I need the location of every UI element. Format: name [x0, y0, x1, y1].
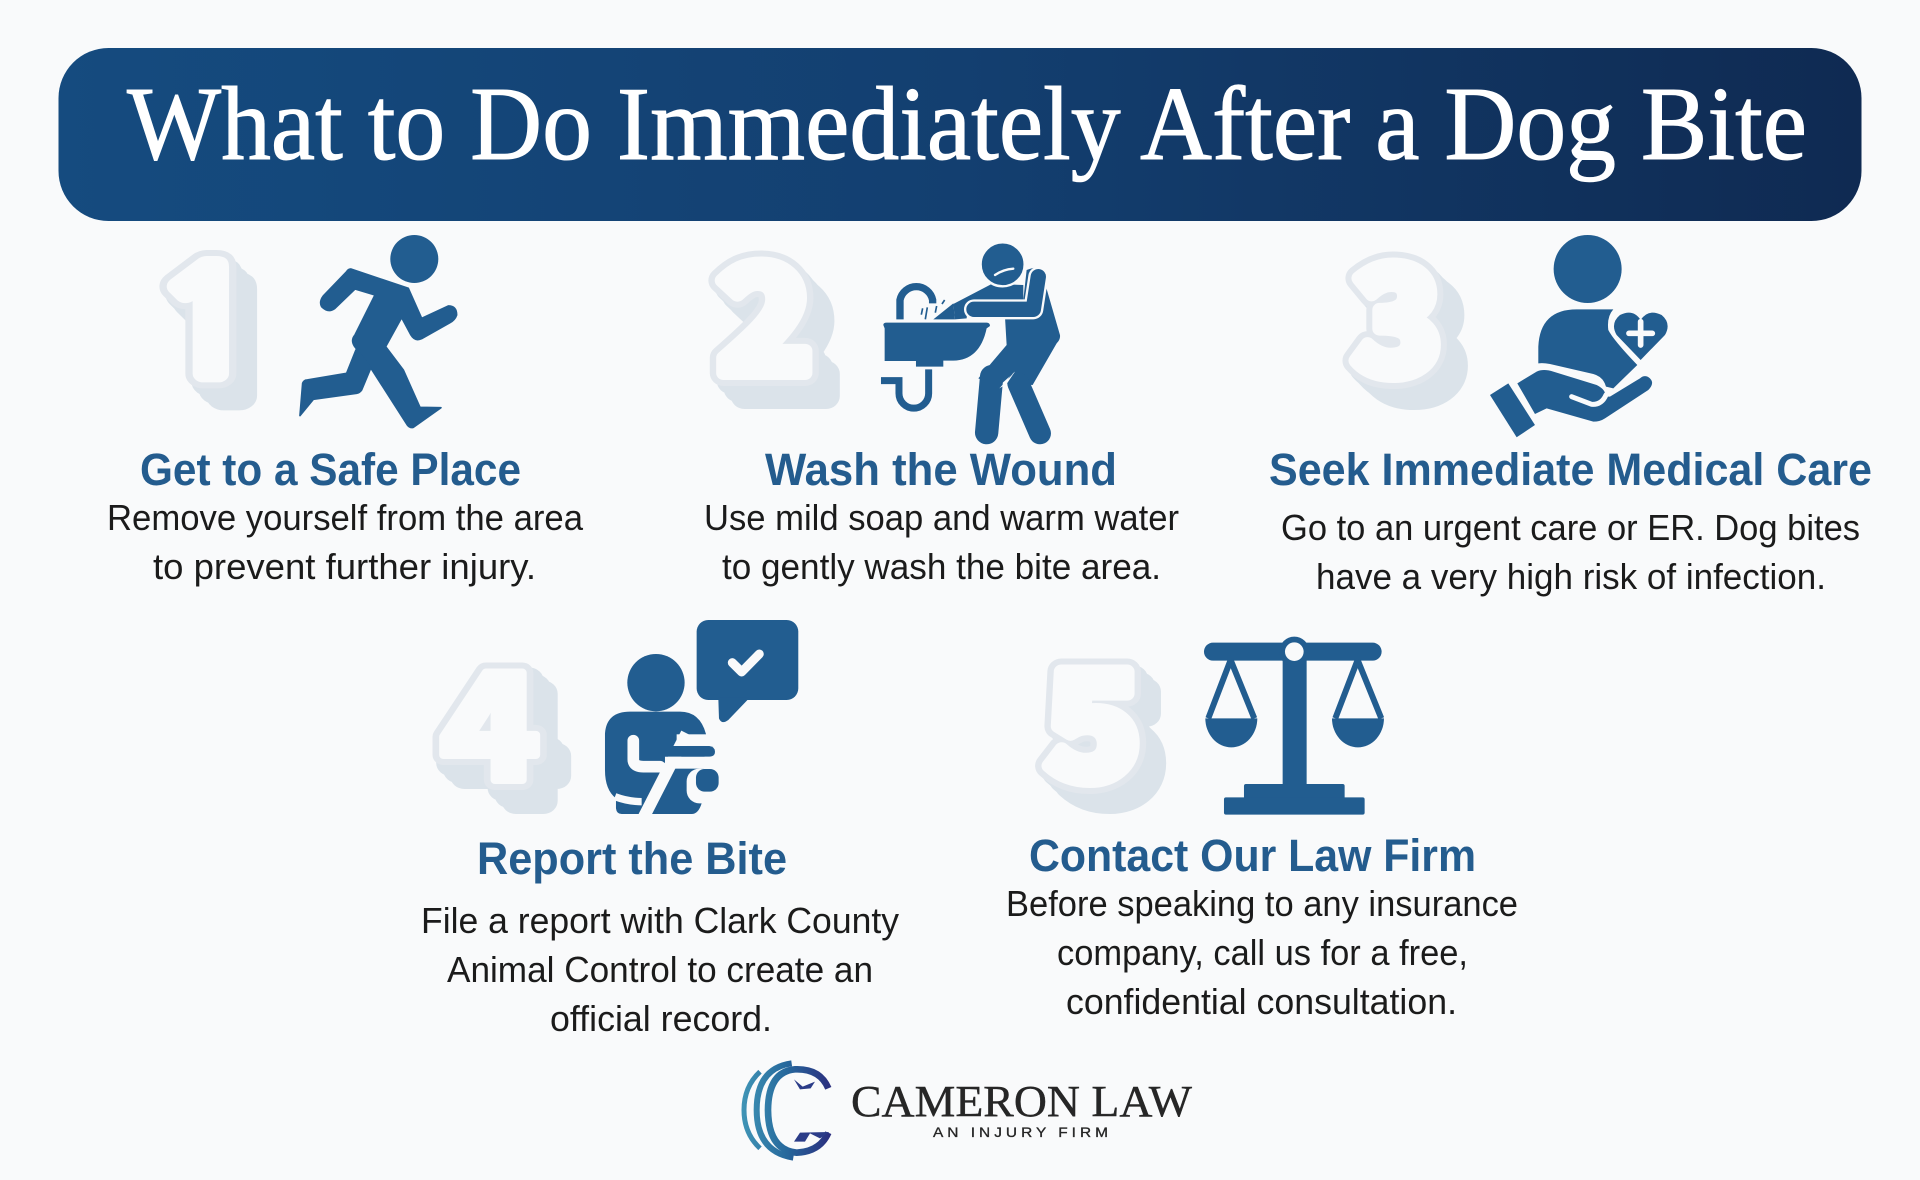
numeral 4: 4 — [440, 608, 540, 823]
numeral 5: 5 — [1065, 627, 1161, 842]
description: to prevent further injury. — [153, 546, 536, 587]
panel: step 5 — [1006, 607, 1518, 1022]
numeral 2: 2 — [738, 224, 834, 439]
logo tagline: AN INJURY FIRM — [933, 1125, 1112, 1140]
description: File a report with Clark County — [421, 900, 899, 941]
numeral 4 — [440, 608, 561, 844]
panel: step 2 — [704, 201, 1179, 587]
numeral 1: 1 — [152, 250, 262, 397]
description: Go to an urgent care or ER. Dog bites — [1281, 507, 1860, 548]
numeral 1: 1 — [152, 250, 262, 397]
panel: step 3 — [1269, 202, 1872, 597]
numeral 3: 3 — [1366, 217, 1456, 432]
numeral 3: 3 — [1359, 210, 1449, 425]
numeral 2 — [717, 201, 834, 439]
numeral 2: 2 — [717, 201, 813, 416]
numeral 4: 4 — [447, 616, 547, 831]
numeral 5: 5 — [1045, 607, 1141, 822]
description: Before speaking to any insurance — [1006, 883, 1518, 924]
logo wordmark: CAMERON LAW — [851, 1077, 1192, 1126]
icon: washing at sink — [881, 242, 1060, 433]
numeral 1: 1 — [166, 266, 275, 413]
heading: Report the Bite — [477, 833, 787, 884]
description — [704, 497, 1179, 587]
numeral 3: 3 — [1373, 223, 1463, 438]
description: to gently wash the bite area. — [722, 546, 1161, 587]
title banner — [58, 48, 1862, 221]
icon: person reporting with speech bubble — [605, 620, 798, 817]
numeral 3: 3 — [1352, 202, 1442, 417]
heading: Contact Our Law Firm — [1029, 830, 1476, 881]
heading: Wash the Wound — [765, 444, 1117, 495]
icon: scales of justice — [1204, 637, 1384, 815]
numeral 5: 5 — [1059, 621, 1155, 836]
panel: step 1 — [107, 235, 584, 587]
description: official record. — [550, 998, 772, 1039]
description: have a very high risk of infection. — [1316, 556, 1826, 597]
heading: Seek Immediate Medical Care — [1269, 444, 1872, 495]
description: Use mild soap and warm water — [704, 497, 1179, 538]
numeral 1: 1 — [173, 272, 282, 419]
icon: caring hand with person and heart — [1490, 235, 1668, 437]
icon: running person — [300, 235, 457, 428]
numeral 2: 2 — [724, 209, 820, 424]
title: What to Do Immediately After a Dog Bite — [127, 65, 1807, 182]
description: Remove yourself from the area — [107, 497, 584, 538]
description: confidential consultation. — [1066, 981, 1457, 1022]
numeral 3: 3 — [1352, 202, 1442, 417]
logo: Cameron Law — [744, 1063, 1192, 1158]
numeral 2: 2 — [731, 217, 827, 432]
description — [107, 497, 584, 587]
description: company, call us for a free, — [1057, 932, 1468, 973]
description — [1281, 507, 1860, 597]
numeral 5: 5 — [1052, 614, 1148, 829]
numeral 5: 5 — [1045, 607, 1141, 822]
logo mark — [744, 1063, 829, 1158]
numeral 1: 1 — [158, 258, 268, 405]
description: Animal Control to create an — [447, 949, 873, 990]
numeral 4: 4 — [440, 608, 540, 823]
description — [421, 900, 899, 1039]
panel: step 4 — [421, 608, 899, 1039]
numeral 2: 2 — [717, 201, 813, 416]
heading: Get to a Safe Place — [140, 444, 521, 495]
numeral 4: 4 — [454, 623, 554, 838]
description — [1006, 883, 1518, 1022]
numeral 4: 4 — [461, 629, 561, 844]
